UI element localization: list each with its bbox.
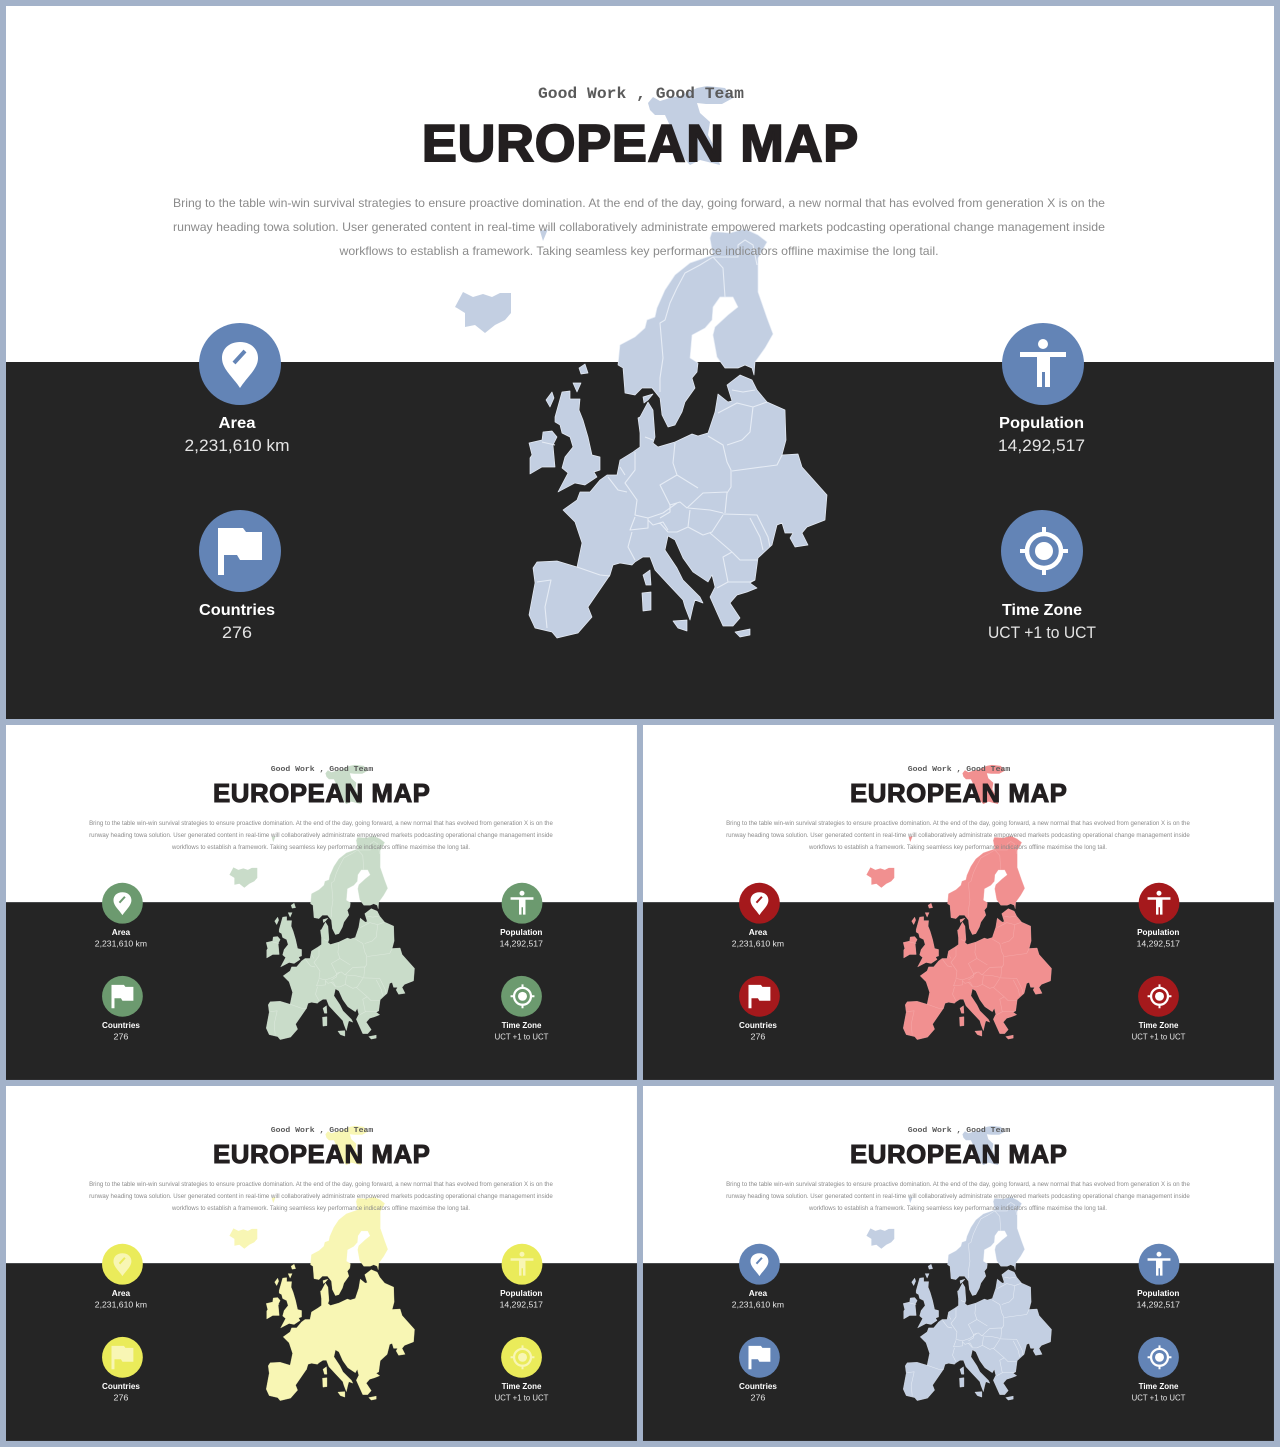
body text: runway heading towa solution. User generated content in real-time will collaboratively administrate empowered markets podcasting operational change management inside (726, 833, 1191, 839)
stat: countries: 276 (113, 1394, 129, 1403)
body text: runway heading towa solution. User generated content in real-time will collaboratively administrate empowered markets podcasting operational change management inside (173, 220, 1105, 234)
stat: population: Population (999, 415, 1084, 432)
tagline: Good Work , Good Team (271, 766, 374, 774)
stat: time zone: Time Zone (1139, 1382, 1179, 1391)
stat: population (998, 323, 1085, 455)
stat: time zone: UCT +1 to UCT (988, 624, 1096, 642)
stat: time zone: UCT +1 to UCT (495, 1033, 548, 1042)
panel: red slide (643, 725, 1274, 1080)
stat: area: Area (749, 928, 768, 937)
stat: area (95, 883, 147, 949)
stat: time zone (495, 976, 548, 1042)
title: EUROPEAN MAP (213, 780, 430, 808)
stat: time zone (1132, 1337, 1185, 1403)
map of Europe (866, 765, 1052, 1040)
panel: yellow slide (6, 1086, 637, 1441)
stat: population: Population (1137, 928, 1180, 937)
stat: countries: 276 (750, 1394, 766, 1403)
stat: countries: 276 (222, 624, 252, 642)
stat: population (500, 1244, 543, 1310)
stat: countries (102, 1337, 143, 1403)
map of Europe (866, 1126, 1052, 1401)
panel: green slide (6, 725, 637, 1080)
stat: time zone: Time Zone (1139, 1021, 1179, 1030)
stat: population (1137, 883, 1180, 949)
stat: area: Area (112, 1289, 131, 1298)
body text: workflows to establish a framework. Taking seamless key performance indicators offline maximise the long tail. (171, 845, 470, 851)
stat: countries: Countries (739, 1382, 777, 1391)
stat: countries: Countries (102, 1382, 140, 1391)
stat: population: 14,292,517 (500, 940, 543, 949)
body text (89, 1182, 554, 1212)
body text: Bring to the table win-win survival strategies to ensure proactive domination. At the end of the day, going forward, a new normal that has evolved from generation X is on the (89, 821, 554, 827)
map of Europe (229, 765, 415, 1040)
stat: population: Population (500, 928, 543, 937)
stat: population: Population (500, 1289, 543, 1298)
body text: Bring to the table win-win survival strategies to ensure proactive domination. At the end of the day, going forward, a new normal that has evolved from generation X is on the (89, 1182, 554, 1188)
title: EUROPEAN MAP (850, 780, 1067, 808)
body text: runway heading towa solution. User generated content in real-time will collaboratively administrate empowered markets podcasting operational change management inside (89, 833, 554, 839)
stat: time zone: Time Zone (502, 1021, 542, 1030)
body text: workflows to establish a framework. Taking seamless key performance indicators offline maximise the long tail. (338, 244, 938, 258)
body text (89, 821, 554, 851)
body text: Bring to the table win-win survival strategies to ensure proactive domination. At the end of the day, going forward, a new normal that has evolved from generation X is on the (726, 1182, 1191, 1188)
stat: countries: Countries (739, 1021, 777, 1030)
tagline: Good Work , Good Team (908, 766, 1011, 774)
body text: runway heading towa solution. User generated content in real-time will collaboratively administrate empowered markets podcasting operational change management inside (89, 1194, 554, 1200)
body text: workflows to establish a framework. Taking seamless key performance indicators offline maximise the long tail. (808, 845, 1107, 851)
stat: time zone: Time Zone (1002, 602, 1082, 619)
stat: area: Area (749, 1289, 768, 1298)
stat: countries: Countries (102, 1021, 140, 1030)
stat: area (95, 1244, 147, 1310)
stat: countries (739, 1337, 780, 1403)
body text: Bring to the table win-win survival strategies to ensure proactive domination. At the end of the day, going forward, a new normal that has evolved from generation X is on the (173, 196, 1105, 210)
body text (726, 1182, 1191, 1212)
tagline: Good Work , Good Team (908, 1127, 1011, 1135)
stat: time zone (495, 1337, 548, 1403)
stat: area (732, 1244, 784, 1310)
stat: area: 2,231,610 km (184, 437, 290, 455)
stat: population: Population (1137, 1289, 1180, 1298)
stat: countries: Countries (199, 602, 275, 619)
body text (173, 196, 1105, 258)
title: EUROPEAN MAP (850, 1141, 1067, 1169)
stat: time zone: UCT +1 to UCT (495, 1394, 548, 1403)
body text: workflows to establish a framework. Taking seamless key performance indicators offline maximise the long tail. (171, 1206, 470, 1212)
title: EUROPEAN MAP (422, 115, 858, 173)
panel: blue small slide (643, 1086, 1274, 1441)
stat: countries (739, 976, 780, 1042)
stat: area: 2,231,610 km (95, 1301, 147, 1310)
tagline: Good Work , Good Team (271, 1127, 374, 1135)
map of Europe (455, 86, 827, 638)
stat: population (1137, 1244, 1180, 1310)
panel: main slide, blue (6, 6, 1274, 719)
stat: time zone: UCT +1 to UCT (1132, 1033, 1185, 1042)
stat: population: 14,292,517 (500, 1301, 543, 1310)
stat: area: Area (112, 928, 131, 937)
stat: area (732, 883, 784, 949)
stat: countries: 276 (750, 1033, 766, 1042)
stat: countries (102, 976, 143, 1042)
stat: area: 2,231,610 km (95, 940, 147, 949)
stat: area: Area (218, 415, 256, 432)
body text: workflows to establish a framework. Taking seamless key performance indicators offline maximise the long tail. (808, 1206, 1107, 1212)
stat: countries: 276 (113, 1033, 129, 1042)
map of Europe (229, 1126, 415, 1401)
stat: area: 2,231,610 km (732, 1301, 784, 1310)
body text: runway heading towa solution. User generated content in real-time will collaboratively administrate empowered markets podcasting operational change management inside (726, 1194, 1191, 1200)
stat: population (500, 883, 543, 949)
stat: time zone: UCT +1 to UCT (1132, 1394, 1185, 1403)
stat: area: 2,231,610 km (732, 940, 784, 949)
body text: Bring to the table win-win survival strategies to ensure proactive domination. At the end of the day, going forward, a new normal that has evolved from generation X is on the (726, 821, 1191, 827)
stat: countries (199, 510, 281, 642)
stat: time zone (988, 510, 1096, 642)
stat: time zone: Time Zone (502, 1382, 542, 1391)
stat: area (184, 323, 290, 455)
stat: population: 14,292,517 (1137, 1301, 1180, 1310)
stat: population: 14,292,517 (1137, 940, 1180, 949)
body text (726, 821, 1191, 851)
stat: time zone (1132, 976, 1185, 1042)
title: EUROPEAN MAP (213, 1141, 430, 1169)
tagline: Good Work , Good Team (538, 85, 744, 103)
stat: population: 14,292,517 (998, 437, 1085, 455)
